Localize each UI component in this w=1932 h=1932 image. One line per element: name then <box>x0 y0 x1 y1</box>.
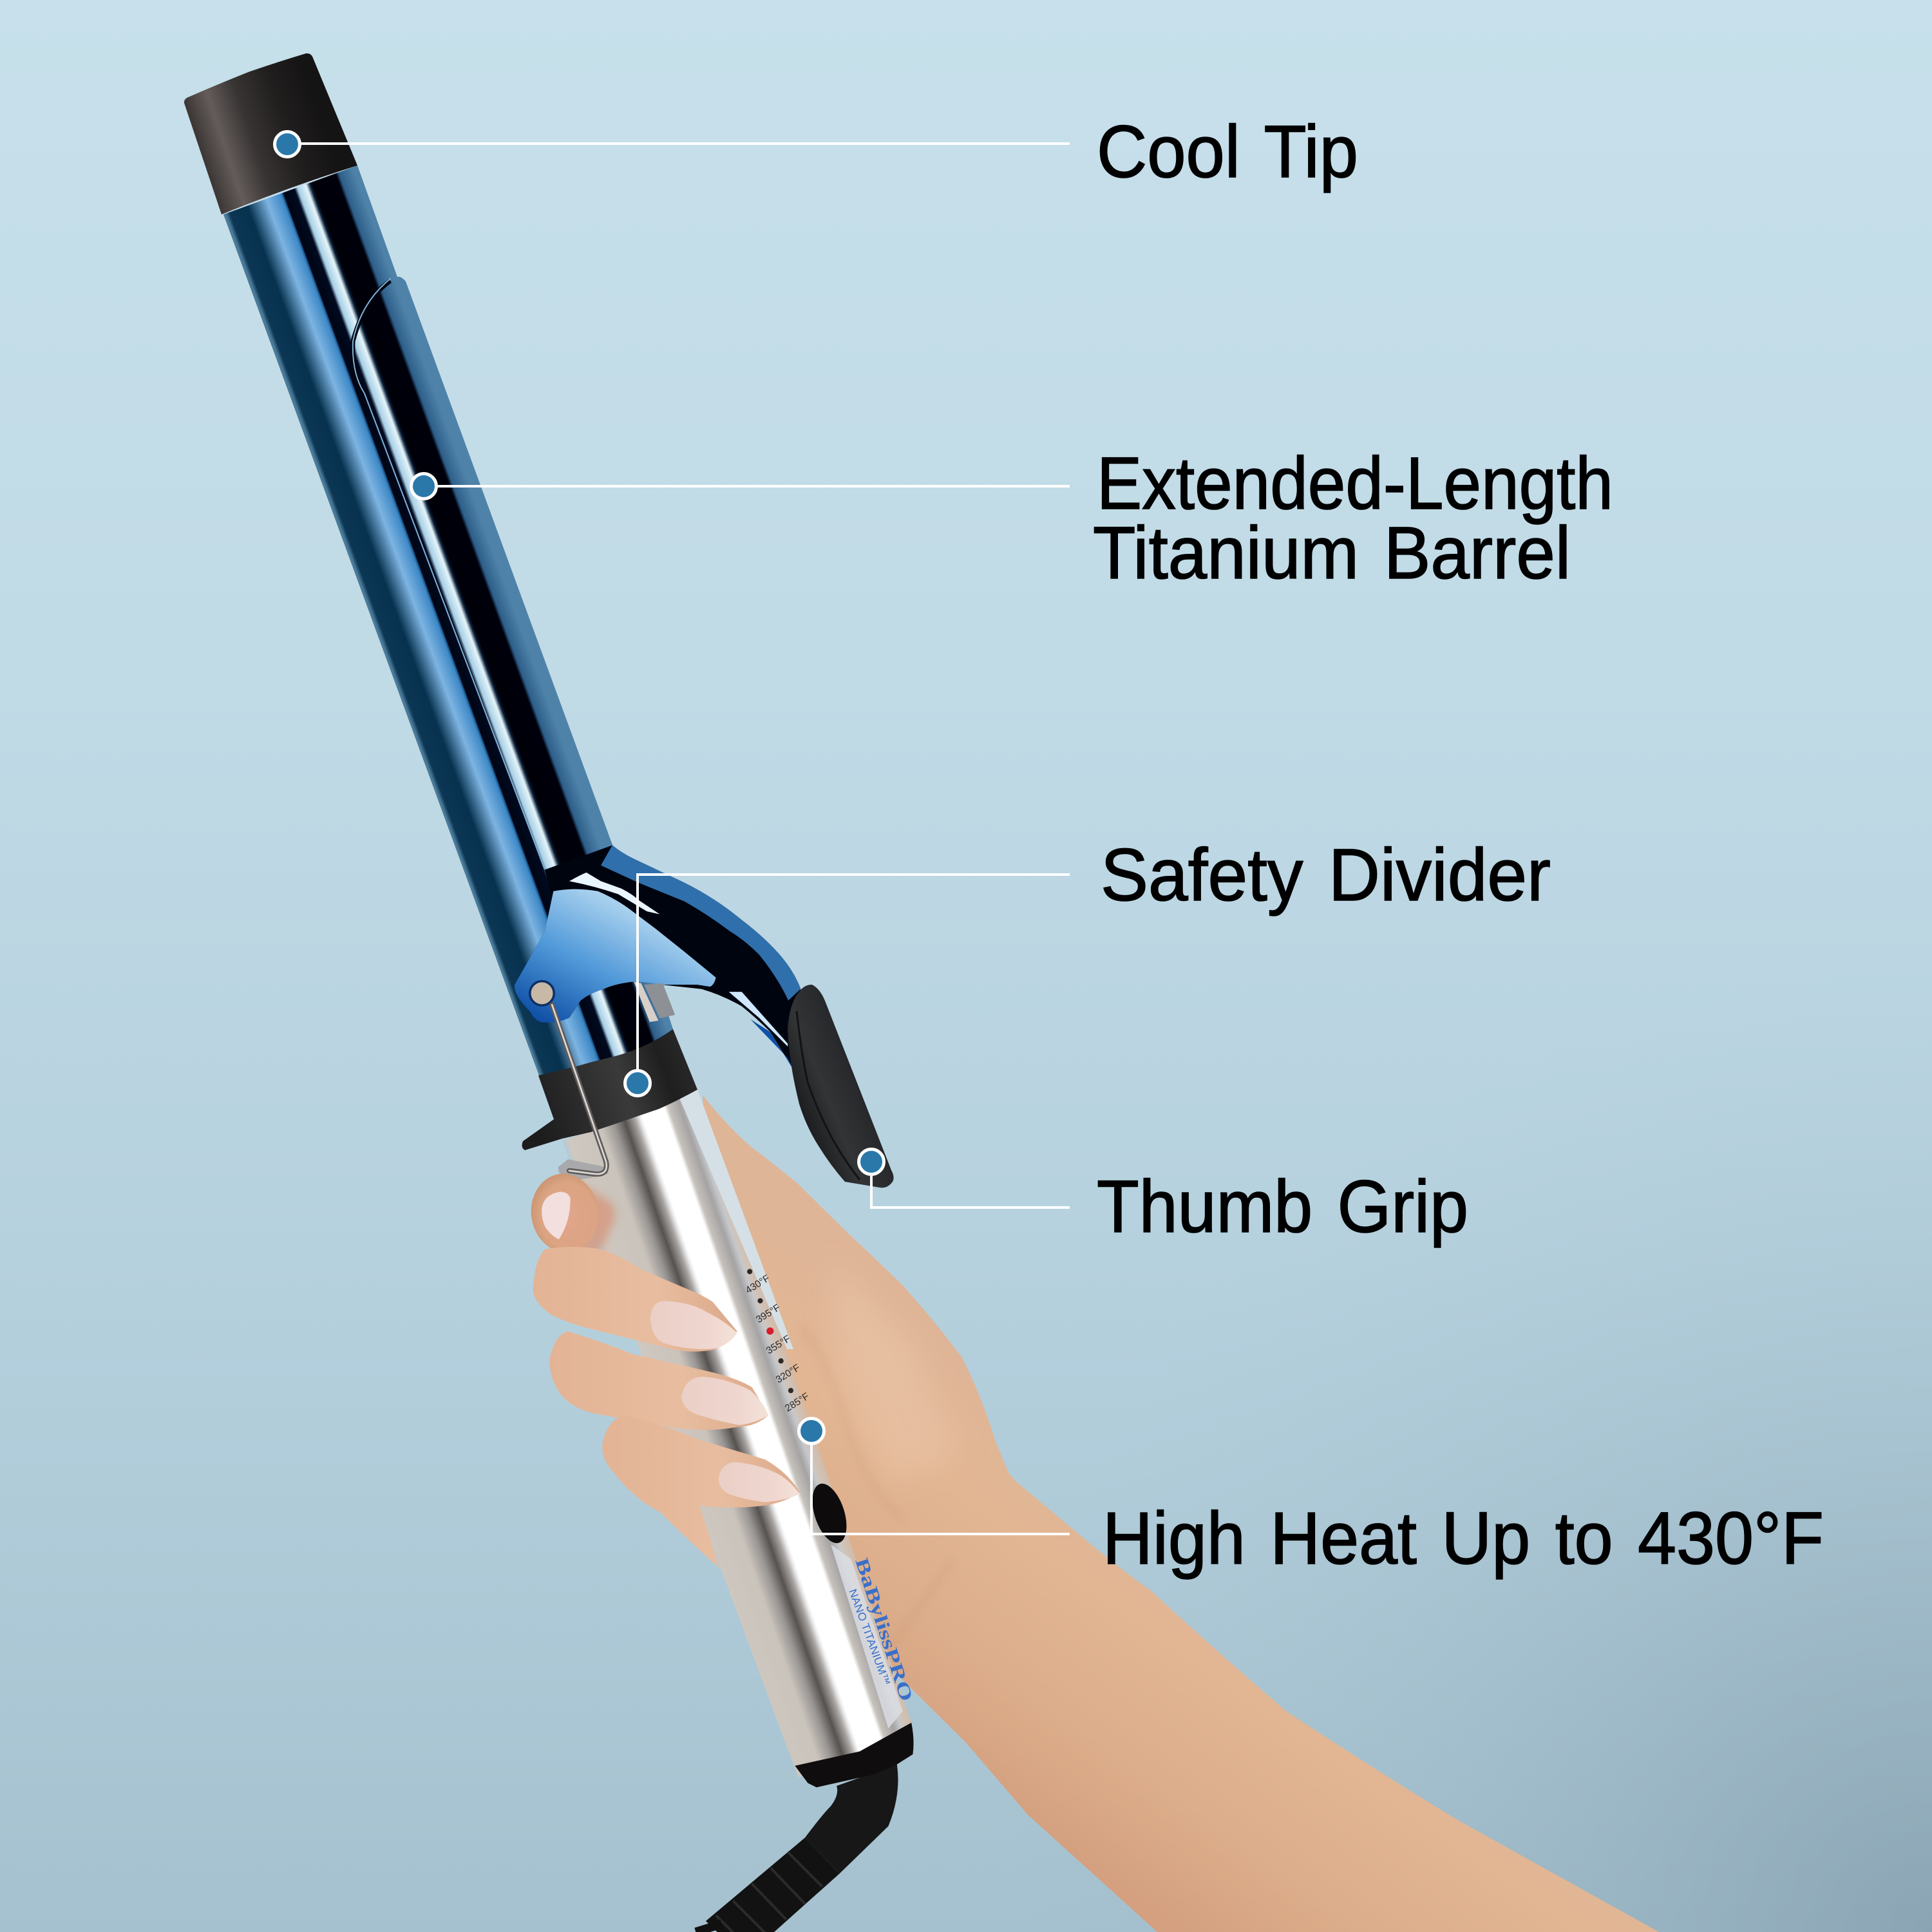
forearm and palm <box>703 1095 1659 1932</box>
callout: barrel <box>411 442 1613 594</box>
thumb nail <box>542 1192 571 1239</box>
lever base <box>515 845 800 1072</box>
temperature labels: 430°F <box>744 1273 772 1296</box>
screw <box>530 981 554 1005</box>
barrel <box>223 166 679 1095</box>
brand name: BaBylissPRO <box>851 1555 916 1704</box>
cool tip cap <box>184 53 357 214</box>
callout: cool tip: Cool Tip <box>1097 111 1358 193</box>
stand wire <box>552 1005 607 1174</box>
collar divider <box>522 1029 697 1150</box>
handle <box>562 1090 911 1777</box>
ring finger and heel <box>602 1415 800 1568</box>
index nail <box>650 1301 737 1349</box>
temperature scale <box>744 1269 811 1414</box>
callout: high heat <box>799 1418 1824 1580</box>
callout: barrel: Extended-Length <box>1097 442 1613 525</box>
temperature labels <box>744 1273 811 1414</box>
clip silver <box>634 982 658 1022</box>
callout: thumb grip: Thumb Grip <box>1097 1166 1468 1248</box>
barrel clamp edge <box>353 278 545 869</box>
red indicator <box>766 1327 773 1334</box>
thin cord <box>696 1924 722 1932</box>
cord ribs <box>716 1852 822 1932</box>
lever upper blue band <box>601 845 800 1001</box>
lever lower glint <box>729 992 788 1046</box>
temperature labels: 355°F <box>764 1333 793 1356</box>
lever top glint <box>569 873 660 914</box>
callout: barrel: Titanium Barrel <box>1093 512 1571 594</box>
middle finger <box>550 1331 768 1430</box>
temperature labels: 395°F <box>754 1302 782 1325</box>
neck ring <box>558 1159 609 1179</box>
temperature labels: 285°F <box>783 1391 811 1414</box>
handle upper light strip <box>679 1090 793 1349</box>
temperature dial dots <box>747 1269 793 1393</box>
callout: safety divider <box>625 834 1551 1096</box>
thumb reflection on handle <box>567 1180 615 1265</box>
brand line: NANO TITANIUM™ <box>846 1587 893 1687</box>
curling iron <box>184 53 916 1932</box>
index finger <box>533 1247 737 1352</box>
handle lower light strip <box>831 1544 903 1728</box>
hand fingers <box>526 1170 800 1568</box>
palm highlight <box>831 1262 960 1481</box>
clamp lever <box>515 845 800 1072</box>
middle nail <box>681 1377 768 1425</box>
ring nail <box>719 1462 800 1502</box>
lever light blue surface <box>515 889 716 1023</box>
ribbed cord <box>706 1838 840 1932</box>
temperature labels: 320°F <box>774 1362 802 1385</box>
palm crease <box>802 1327 953 1649</box>
clip spring <box>644 983 675 1018</box>
power switch <box>806 1479 853 1548</box>
callout: high heat: High Heat Up to 430°F <box>1103 1497 1824 1580</box>
callout: thumb grip <box>859 1149 1468 1248</box>
lever lower blue lip <box>750 1019 795 1072</box>
handle end cap <box>795 1723 914 1787</box>
fingertip <box>526 1170 603 1257</box>
callout: cool tip <box>274 111 1358 193</box>
brand text <box>846 1555 916 1704</box>
strain relief <box>805 1765 898 1873</box>
cord end <box>696 1765 898 1932</box>
thumb grip <box>788 985 894 1188</box>
callout: safety divider: Safety Divider <box>1101 834 1551 916</box>
grip inner ridge <box>797 1011 860 1180</box>
